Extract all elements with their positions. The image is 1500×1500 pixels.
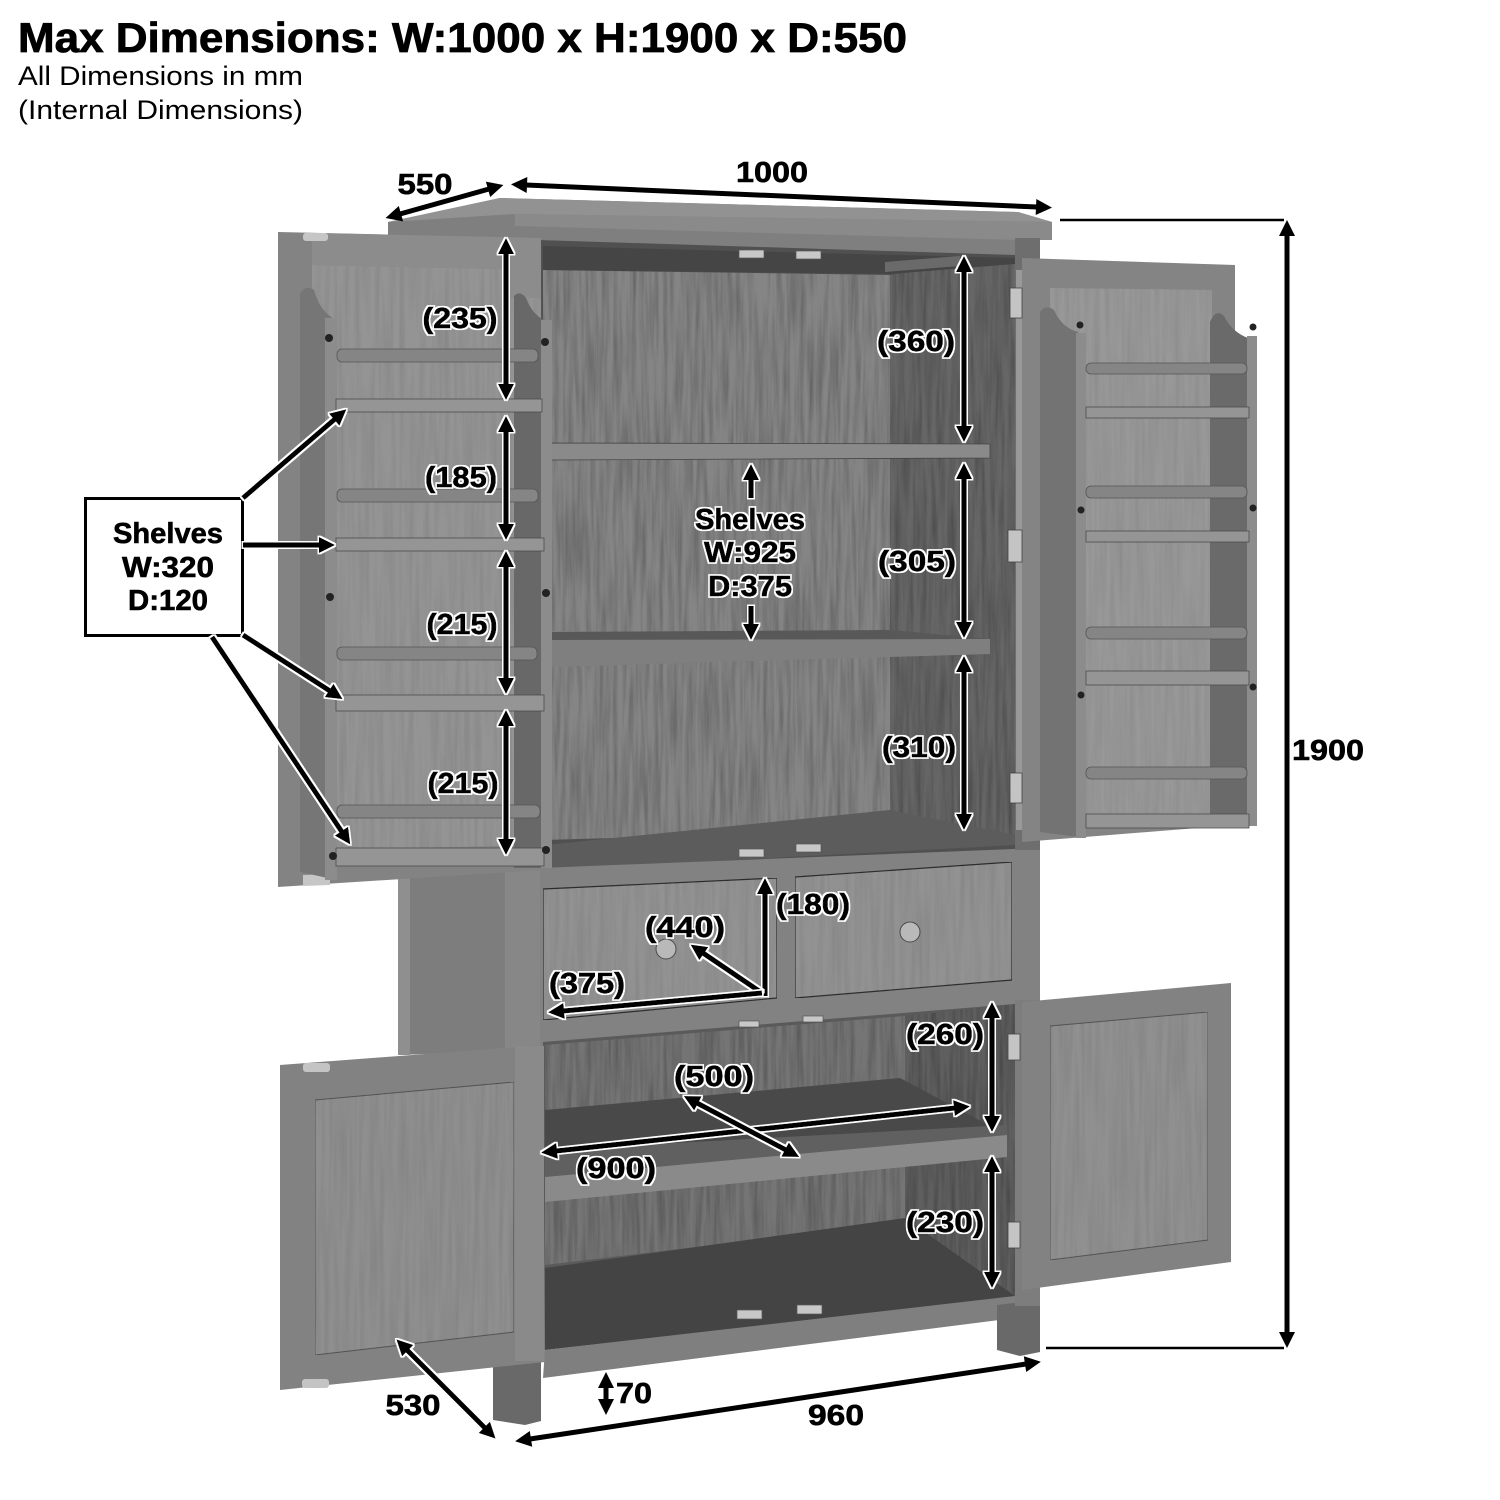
right spice rack [1040,307,1257,838]
interior height dimensions [877,271,992,1273]
arrow 215 lower: (215) [428,768,498,800]
width dimension 1000 [526,157,1037,207]
arrow 305: (305) [878,546,956,578]
rack rails [337,349,540,818]
central shelf label [695,479,805,625]
arrow 180 [765,889,850,996]
worktop [388,198,1052,262]
rack shelves callout [86,419,342,832]
subtitle: units note: (Internal Dimensions) [18,95,303,125]
subtitle: units note [18,61,303,125]
arrow 180: (180) [776,889,850,921]
door hinges [1008,288,1022,1248]
width dimension 1000: 1000 [736,157,808,189]
cabinet floor [543,1218,1015,1378]
arrow 185: (185) [425,462,497,494]
callout arrows [212,419,342,832]
base width dimension 960 [530,1364,1026,1439]
rack side panels [1040,307,1257,838]
upper carcass interior [538,240,1015,870]
title: Max Dimensions: W:1000 x H:1900 x D:550 [18,14,907,61]
lower shelf dimensions [556,1061,955,1185]
callout box [86,498,242,636]
callout box: Shelves [113,518,223,550]
arrow 500: (500) [674,1061,754,1093]
upper shelves [550,443,990,667]
arrow 215 upper: (215) [426,609,498,641]
arrow 900: (900) [576,1153,656,1185]
arrow 375 [549,968,762,1011]
door dimension 530 [386,1350,485,1428]
callout box: D:120 [128,585,208,617]
central shelf label: W:925 [704,537,796,569]
left upper door [278,232,542,887]
arrow 900 [556,1108,955,1185]
central shelf label: Shelves [695,504,805,536]
drawer left [543,878,777,1020]
carcass left side [398,860,542,1055]
rack shelves [336,399,544,866]
rack shelves [1086,407,1249,828]
arrow 440: (440) [645,912,725,944]
subtitle: units note: All Dimensions in mm [18,61,303,91]
screw holes [1076,322,1256,698]
cabinet illustration [278,198,1257,1425]
arrow 440 [645,912,762,993]
arrow 230 [906,1171,992,1273]
arrow 185 [425,431,506,525]
arrow 360: (360) [877,326,955,358]
screw holes [325,334,550,860]
central shelf label: D:375 [708,571,792,603]
rack side panels [300,288,552,880]
right upper door [1016,258,1235,842]
depth dimension 550 [398,169,489,214]
arrow 310: (310) [882,732,956,764]
hinges lower [737,1016,823,1319]
left spice rack [300,288,552,880]
left lower door [280,1045,545,1390]
overall height dimension [1046,220,1287,1348]
lower carcass interior [543,1004,1015,1350]
rack rails [1086,363,1247,779]
arrow 260: (260) [906,1019,984,1051]
arrow 215 lower [428,725,506,840]
arrow 235: (235) [422,303,498,335]
label 1900: 1900 [1292,735,1364,767]
right lower door [1022,983,1231,1290]
top hinges [739,250,821,857]
arrow 230: (230) [906,1207,984,1239]
door dimension 530: 530 [386,1390,440,1422]
leg height dimension 70: 70 [616,1378,652,1410]
drawer dimensions [549,889,850,1011]
middle rail [540,848,1040,1048]
arrow 260 [906,1017,992,1117]
arrow 500 [674,1061,786,1150]
base width dimension 960: 960 [808,1400,864,1432]
drawer right [795,862,1012,998]
arrow 375: (375) [549,968,625,1000]
callout box: W:320 [122,552,214,584]
depth dimension 550: 550 [398,169,452,201]
door rack dimensions [422,253,506,840]
arrow 235 [422,253,506,385]
legs [493,238,1040,1425]
lower shelf [545,1078,1007,1202]
arrow 215 upper [426,566,506,679]
